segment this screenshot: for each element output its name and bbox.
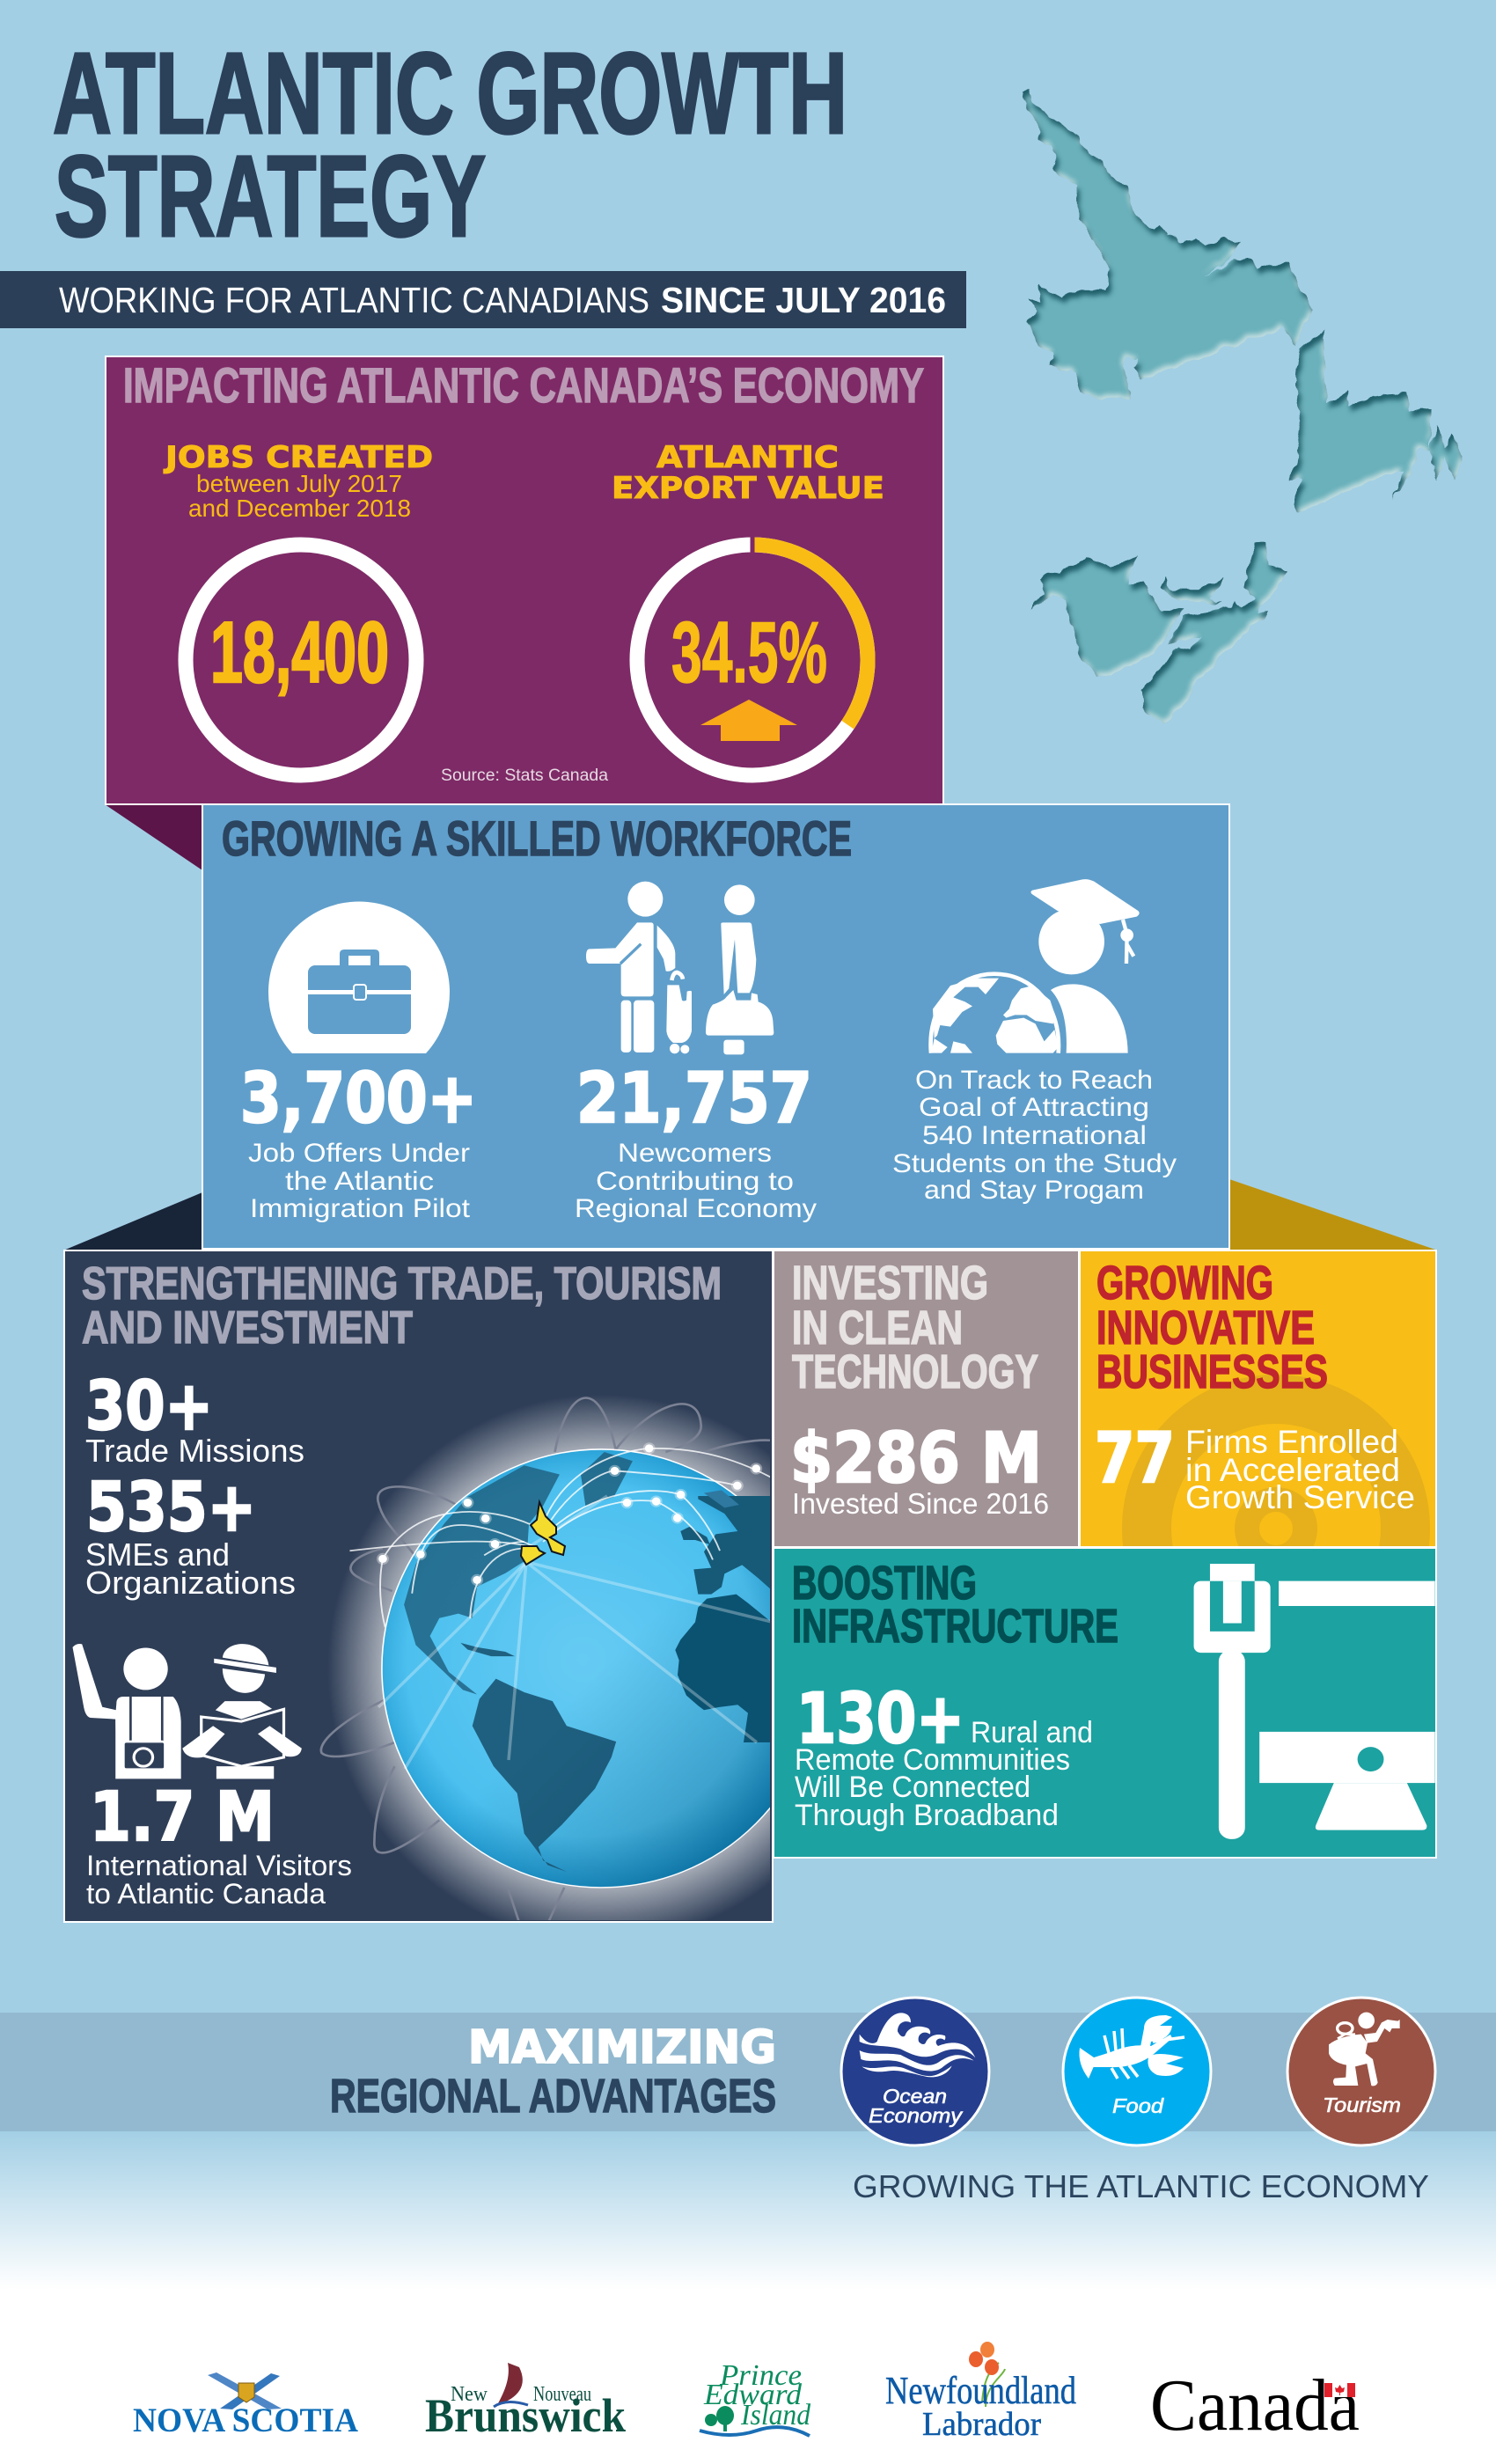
icon: tourism — [1287, 1998, 1435, 2145]
logo: Nova Scotia — [133, 2372, 358, 2439]
ring chart: jobs created: 18,400 — [210, 604, 389, 700]
logo: Canada: Canada — [1150, 2365, 1360, 2446]
heading: infrastructure — [792, 1557, 1118, 1653]
stat: trade missions — [85, 1368, 304, 1469]
panel: economy impact — [106, 356, 943, 804]
subtitle banner: WORKING FOR ATLANTIC CANADIANS — [59, 280, 649, 320]
heading: workforce: GROWING A SKILLED WORKFORCE — [222, 810, 852, 866]
icon: tourists — [72, 1644, 302, 1778]
text: international students: and Stay Progam — [924, 1176, 1144, 1205]
route dots — [378, 1444, 760, 1584]
icon: ocean economy: Economy — [869, 2104, 964, 2127]
title: ATLANTIC GROWTH — [53, 28, 847, 158]
map of Atlantic Canada — [1023, 89, 1463, 724]
heading: clean technology: IN CLEAN — [792, 1302, 963, 1354]
stat: job offers: the Atlantic — [285, 1167, 434, 1196]
heading: innovative businesses: GROWING — [1096, 1257, 1273, 1309]
map: New Brunswick — [1030, 555, 1184, 677]
stat: broadband: Rural and — [971, 1716, 1093, 1749]
icon: broadband cable — [1194, 1564, 1435, 1839]
logo: New Brunswick: New — [451, 2383, 488, 2406]
heading: clean technology — [792, 1257, 1038, 1398]
stat: newcomers: Contributing to — [596, 1167, 794, 1196]
stat: firms enrolled: in Accelerated — [1185, 1452, 1400, 1488]
stat: SMEs: 535+ — [86, 1469, 256, 1547]
stat: newcomers: Newcomers — [618, 1139, 772, 1168]
stat: job offers: 3,700+ — [240, 1060, 477, 1139]
heading: economy: IMPACTING ATLANTIC CANADA’S ECONOMY — [123, 357, 924, 413]
stat: newcomers: 21,757 — [576, 1060, 812, 1139]
heading: infrastructure: INFRASTRUCTURE — [792, 1600, 1118, 1653]
stat: newcomers: Regional Economy — [575, 1194, 817, 1223]
panel: skilled workforce — [202, 804, 1229, 1249]
heading: innovative businesses — [1096, 1257, 1328, 1398]
text: international students: Students on the Study — [892, 1149, 1177, 1178]
stat: SMEs: SMEs and — [85, 1536, 230, 1573]
icon: up arrow — [700, 700, 797, 741]
heading: trade — [82, 1258, 722, 1353]
tagline: GROWING THE ATLANTIC ECONOMY — [853, 2168, 1429, 2204]
map: Prince Edward Island — [1160, 576, 1226, 603]
text: jobs created label: and December 2018 — [188, 495, 411, 522]
icon: tourism: Tourism — [1323, 2094, 1401, 2116]
stat: broadband: Remote Communities — [795, 1743, 1070, 1777]
icon: briefcase — [268, 901, 450, 1053]
fold: gold — [1229, 1179, 1438, 1250]
orbit lines — [321, 1398, 774, 1924]
map: Labrador — [1023, 89, 1313, 399]
source note: Source: Stats Canada — [441, 766, 608, 785]
stat: newcomers — [575, 1060, 817, 1223]
text: export value label — [612, 440, 884, 506]
text: export value label: ATLANTIC — [656, 440, 839, 475]
subtitle banner: SINCE JULY 2016 — [661, 280, 946, 320]
stat: international visitors: to Atlantic Canada — [86, 1878, 326, 1910]
text: jobs created label: JOBS CREATED — [164, 440, 433, 475]
text: international students: 540 International — [922, 1121, 1147, 1150]
heading: trade: STRENGTHENING TRADE, TOURISM — [82, 1258, 722, 1309]
stat: firms enrolled: Growth Service — [1185, 1479, 1415, 1515]
fold: navy — [63, 1192, 202, 1250]
icon: newcomers — [586, 882, 774, 1054]
stat: firms enrolled — [1095, 1419, 1415, 1515]
title — [53, 28, 847, 260]
icon: Atlantic provinces highlight — [521, 1502, 565, 1565]
globe illustration — [320, 1397, 770, 1920]
stat: SMEs — [85, 1469, 296, 1601]
logo: Prince Edward Island: Prince — [719, 2359, 802, 2392]
stat: firms enrolled: 77 — [1095, 1419, 1175, 1499]
band: regional advantages: REGIONAL ADVANTAGES — [330, 2070, 776, 2123]
heading: infrastructure: BOOSTING — [792, 1557, 977, 1610]
route lines — [378, 1496, 772, 1769]
logo: New Brunswick: Brunswick — [425, 2389, 626, 2442]
icon: graduate and globe — [931, 879, 1140, 1053]
stat: broadband: Will Be Connected — [795, 1771, 1030, 1804]
icon: food — [1063, 1998, 1211, 2145]
text: international students — [892, 1066, 1177, 1205]
text: international students: On Track to Reach — [915, 1066, 1153, 1095]
stat: broadband — [795, 1680, 1093, 1832]
heading: innovative businesses: INNOVATIVE — [1096, 1302, 1315, 1354]
heading: trade: AND INVESTMENT — [82, 1302, 413, 1353]
stat: international visitors: International Visitors — [86, 1850, 352, 1881]
stat: invested: Invested Since 2016 — [792, 1487, 1049, 1520]
panel: infrastructure — [774, 1548, 1436, 1858]
title: STRATEGY — [55, 131, 486, 260]
heading: innovative businesses: BUSINESSES — [1096, 1346, 1328, 1398]
logo: New Brunswick: Nouveau — [533, 2383, 591, 2406]
panel: clean technology — [774, 1250, 1079, 1547]
target rings — [1122, 1375, 1430, 1546]
logo: Newfoundland Labrador: Labrador — [922, 2406, 1041, 2443]
stat: job offers: Immigration Pilot — [250, 1194, 471, 1223]
stat: trade missions: Trade Missions — [85, 1433, 304, 1469]
panel: trade, tourism and investment — [63, 1250, 774, 1923]
map: Newfoundland — [1288, 331, 1463, 513]
ring chart: export value: 34.5% — [671, 604, 827, 700]
ring chart: export value — [637, 537, 868, 775]
stat: international visitors — [86, 1778, 352, 1910]
text: export value label: EXPORT VALUE — [612, 471, 884, 506]
continents — [404, 1452, 633, 1872]
text: jobs created label — [164, 440, 433, 522]
map: Nova Scotia — [1141, 542, 1288, 724]
heading: clean technology: INVESTING — [792, 1257, 988, 1309]
stat: firms enrolled: Firms Enrolled — [1185, 1424, 1398, 1460]
ring chart: jobs created — [186, 545, 416, 775]
stat: broadband: 130+ — [796, 1680, 964, 1759]
stat: job offers: Job Offers Under — [248, 1139, 470, 1168]
stat: trade missions: 30+ — [85, 1368, 213, 1446]
text: jobs created label: between July 2017 — [196, 470, 402, 497]
stat: invested: $286 M — [790, 1419, 1042, 1499]
icon: ocean economy — [841, 1998, 989, 2145]
logo: Prince Edward Island: Edward — [703, 2379, 803, 2411]
subtitle banner — [0, 271, 966, 328]
logo: Newfoundland Labrador: Newfoundland — [885, 2369, 1076, 2412]
band: regional advantages — [0, 2013, 1496, 2131]
heading: clean technology: TECHNOLOGY — [792, 1346, 1038, 1398]
logo: Prince Edward Island: Island — [740, 2399, 811, 2431]
band: regional advantages: MAXIMIZING — [468, 2021, 776, 2074]
continents: Africa and Europe — [675, 1490, 772, 1742]
stat: international visitors: 1.7 M — [90, 1778, 275, 1857]
logo: Newfoundland Labrador — [885, 2342, 1076, 2443]
icon: ocean economy: Ocean — [883, 2085, 947, 2108]
panel: innovative businesses — [1080, 1250, 1437, 1547]
icon: food: Food — [1112, 2094, 1164, 2117]
text: international students: Goal of Attracting — [919, 1093, 1149, 1122]
stat: SMEs: Organizations — [85, 1565, 296, 1601]
logo: New Brunswick — [425, 2363, 626, 2442]
logo: Prince Edward Island — [700, 2359, 811, 2436]
stat: broadband: Through Broadband — [795, 1799, 1059, 1832]
stat: job offers — [240, 1060, 477, 1223]
logo: Nova Scotia: NOVA SCOTIA — [133, 2402, 358, 2439]
fold: purple — [105, 804, 202, 870]
